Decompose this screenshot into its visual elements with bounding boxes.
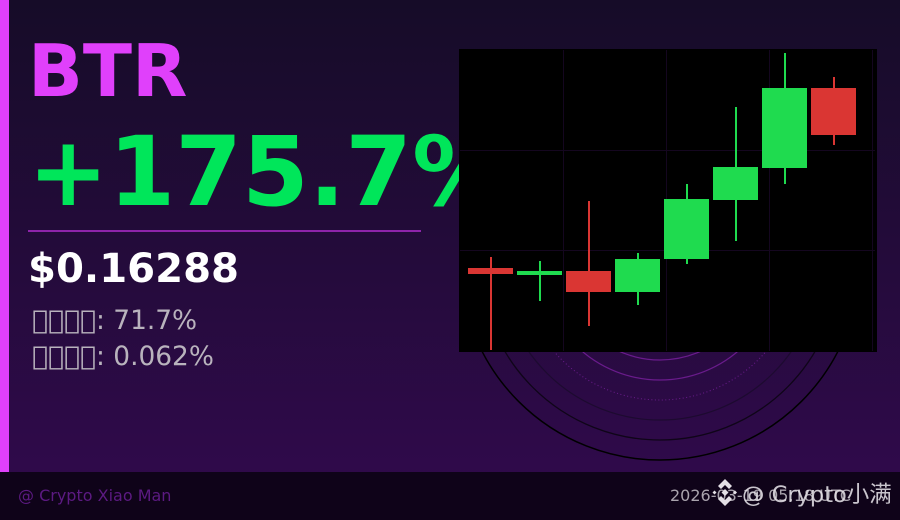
candle 7 — [762, 53, 807, 184]
footer bar — [0, 472, 900, 520]
candle 4 — [615, 253, 660, 305]
ticker title: BTR — [28, 29, 187, 113]
chart grid — [460, 50, 875, 351]
candle 3 — [566, 201, 611, 326]
candlestick chart — [459, 49, 877, 352]
footer handle: @ Crypto Xiao Man — [18, 486, 171, 505]
watermark: @ Crypto小满 — [742, 482, 892, 508]
concentric rings — [460, 60, 860, 460]
candle 1 — [468, 257, 513, 350]
footer timestamp: 2026-03-19 05:18 UTC — [670, 486, 851, 505]
chart panel — [459, 49, 877, 352]
accent bar — [0, 0, 9, 472]
percent change: +175.7% — [28, 116, 508, 228]
candle 6 — [713, 107, 758, 241]
candle 5 — [664, 184, 709, 264]
candle 2 — [517, 261, 562, 301]
icon: diamond logo — [712, 479, 737, 506]
stat: funding rate: : 0.062% — [32, 341, 214, 372]
price: $0.16288 — [28, 246, 239, 292]
stat: ratio: : 71.7% — [32, 305, 197, 336]
candle 8 — [811, 77, 856, 145]
divider — [28, 230, 421, 232]
